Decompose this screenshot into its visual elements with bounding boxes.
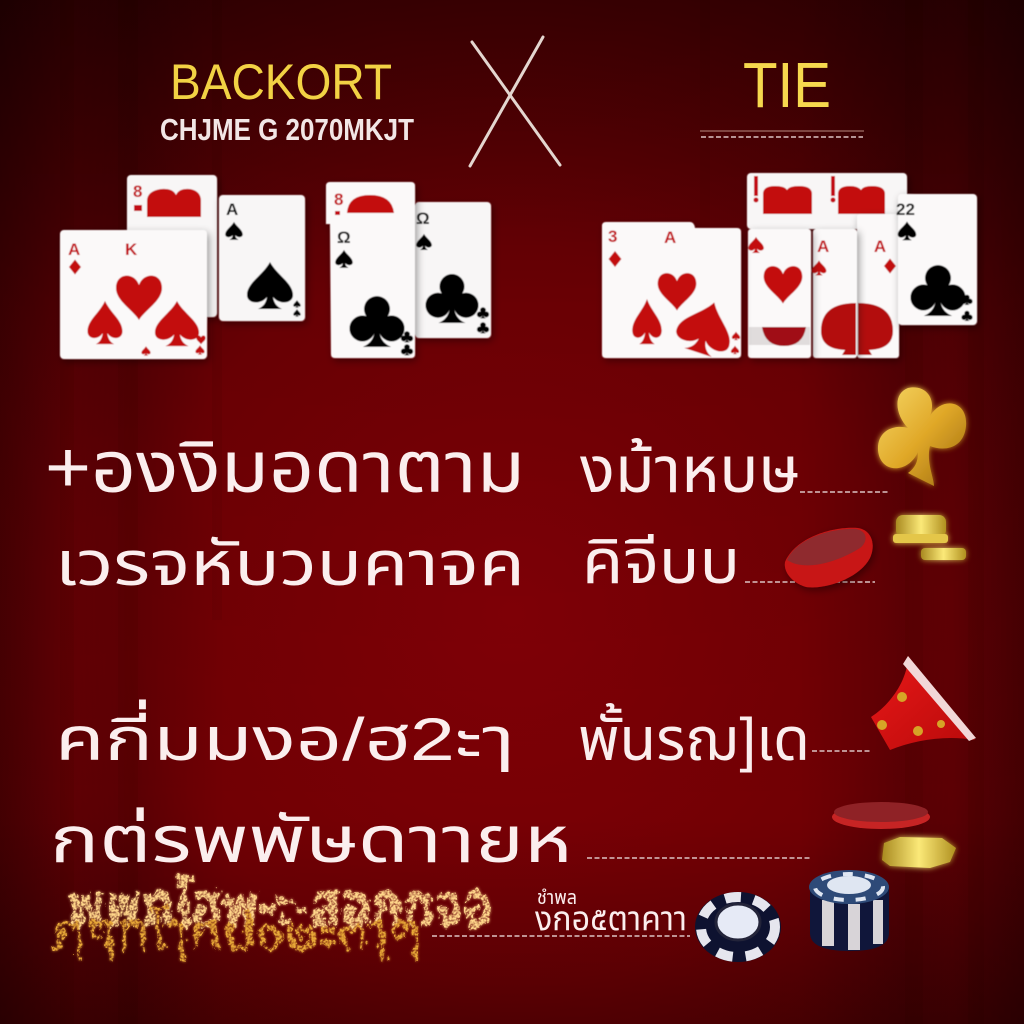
card: back red hearts: 8: [133, 182, 142, 201]
text row 1 right: งม้าหบษ: [580, 434, 800, 506]
card: club right: 22: [896, 200, 915, 219]
card: club tall: 8: [334, 190, 343, 209]
small text bottom right: งกอ๕ตาคาา: [535, 900, 687, 938]
title: BACKORT: BACKORT: [170, 54, 392, 110]
icon: gold hex coin: [882, 837, 956, 868]
TIE underline rules: [700, 131, 864, 137]
card: large with hearts and spades: [602, 222, 741, 361]
icon: flat red chip: [832, 802, 930, 829]
card: large with hearts and spades: A: [664, 228, 676, 247]
text: distorted gold line: ฦๆทโๅกป๑๒ะ๓ๅๆ: [52, 904, 422, 962]
text row 3 left: คกี่มมงอ/ฮ2ะๅ: [55, 699, 515, 773]
card: spade ace: [219, 195, 305, 321]
card: front ace of hearts: A: [68, 240, 80, 259]
panel: right cards: [602, 173, 977, 361]
card: strip middle with ace: A: [817, 237, 829, 256]
card: club tall: [326, 182, 415, 358]
card: strip tall right with ace: A: [874, 237, 886, 256]
card: club right back: [415, 202, 491, 338]
card: club right: [896, 194, 977, 325]
icon: navy chip front: [695, 892, 781, 962]
leader row 1: [800, 491, 890, 493]
leader row 5: [432, 935, 690, 937]
icon: gold coins: [893, 515, 966, 560]
leader row 3: [812, 750, 870, 752]
text row 2 left: เวรจหับวบคาจค: [55, 530, 525, 599]
leader row 4: [587, 857, 812, 859]
text row 2 right: คิจีบบ: [582, 528, 740, 597]
icon: gold club: [878, 387, 966, 486]
card: back red hearts: [127, 175, 217, 317]
text: distorted gold line: พพทโฮพ-ะ-สอกกจอ: [68, 871, 493, 940]
panel: left cards: [60, 175, 491, 359]
card: strip tall right with ace: [857, 214, 899, 358]
card: club right back: Ω: [416, 209, 430, 228]
card: front ace of hearts: K: [125, 240, 138, 259]
text row 1 left: +องงิมอดาตาม: [45, 428, 525, 508]
card: top wide hearts: [747, 173, 907, 229]
text: distorted gold line: [52, 871, 493, 962]
card: club tall: Ω: [337, 228, 351, 247]
card: strip with heart: [748, 229, 811, 358]
card: strip middle with ace: [812, 229, 857, 358]
card: front ace of hearts: [60, 230, 207, 359]
icon: red chip: [785, 528, 873, 587]
icon: navy chip stack: [809, 870, 889, 951]
small text above bottom leader: ชำพล: [537, 887, 577, 909]
text row 4: กต่รพพัษดาายห: [50, 804, 572, 876]
card: spade ace: A: [226, 200, 238, 219]
text row 3 right: พั้นรฌ]เด: [578, 702, 810, 773]
card: large with hearts and spades: 3: [608, 227, 617, 246]
icon: red megaphone: [871, 656, 976, 750]
title: TIE: TIE: [743, 49, 831, 121]
icon: crossed X lines: [470, 37, 560, 166]
leader row 2: [745, 581, 875, 583]
subtitle under BACKORT: CHJME G 2070MKJT: [160, 112, 414, 147]
